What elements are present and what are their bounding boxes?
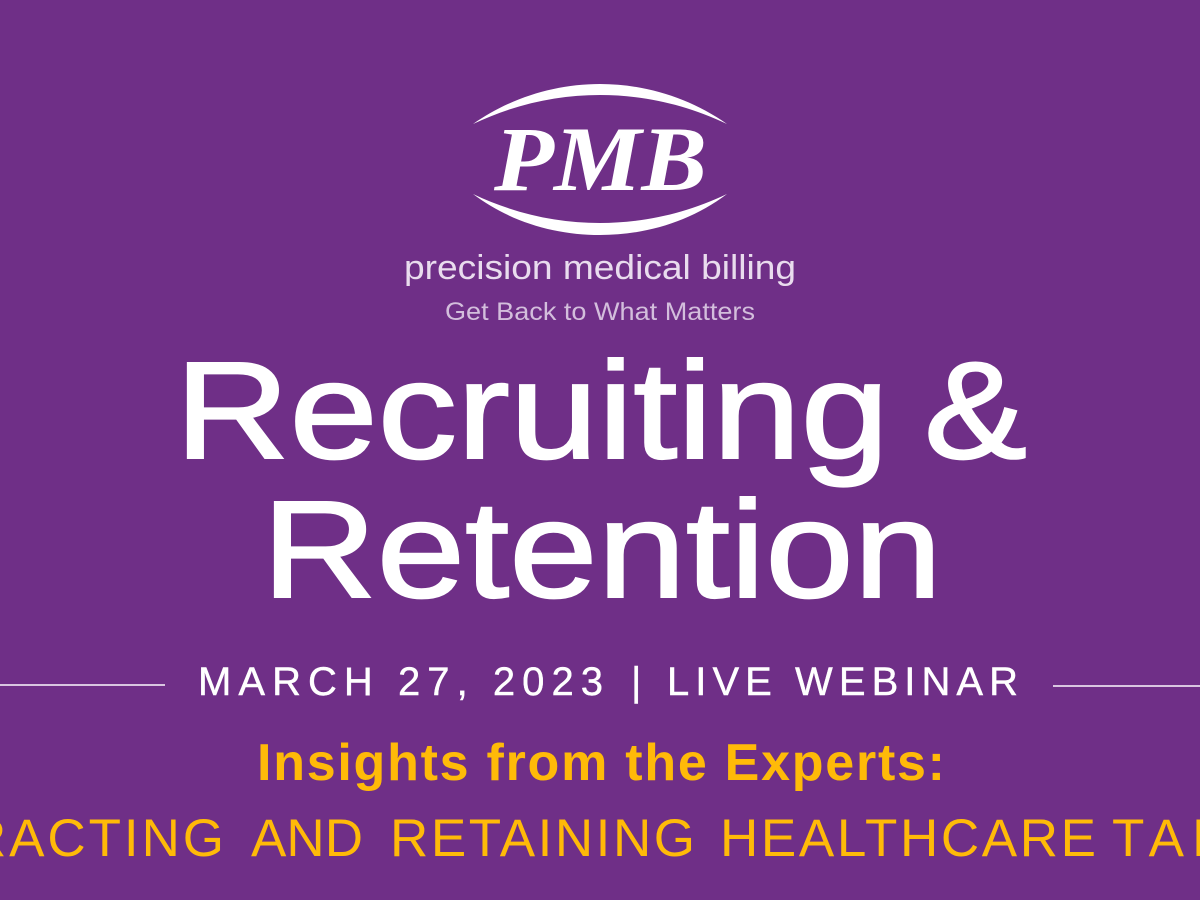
title line 1: Recruiting	[175, 334, 889, 488]
date line: |	[631, 660, 641, 704]
logo bottom arc	[473, 194, 727, 235]
logo letters: PMB	[493, 108, 707, 210]
subtitle line 2, clipped at edges: AND	[251, 809, 363, 868]
title line 2: Retention	[262, 473, 942, 627]
right divider	[1053, 685, 1200, 687]
logo: PMB	[473, 84, 727, 235]
tagline: Get Back to What Matters	[445, 298, 755, 326]
logo top arc	[473, 84, 727, 124]
left divider	[0, 684, 165, 686]
title	[175, 334, 1027, 627]
date line: MARCH 27, 2023	[198, 660, 603, 704]
date line: LIVE WEBINAR	[667, 660, 1018, 704]
company name: precision medical billing	[404, 249, 796, 287]
subtitle: Insights from the Experts:	[257, 734, 945, 792]
subtitle line 2, clipped at edges: HEALTHCARE	[720, 809, 1096, 868]
subtitle line 2, clipped at edges: RETAINING	[390, 809, 695, 868]
title line 1: &	[924, 334, 1027, 488]
